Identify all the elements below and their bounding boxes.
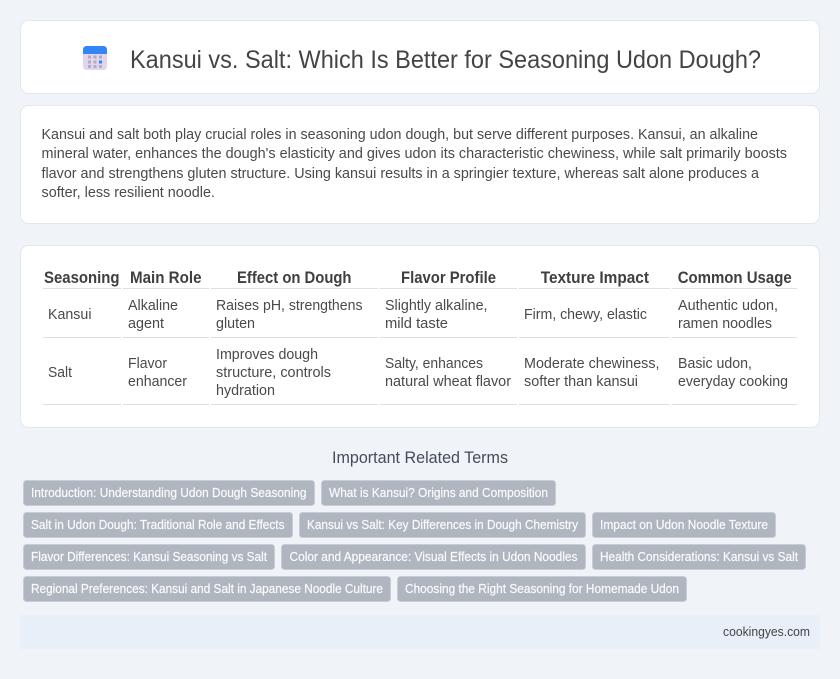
table header row: Seasoning bbox=[44, 269, 120, 287]
tag: Color and Appearance: Visual Effects in Udon Noodles bbox=[290, 550, 578, 564]
table row: Kansui: Kansui bbox=[48, 307, 92, 323]
panel: header bbox=[20, 20, 820, 94]
tag bbox=[592, 544, 806, 570]
table row: Salt: Moderate chewiness, bbox=[524, 356, 660, 372]
table header row: Effect on Dough bbox=[237, 269, 352, 287]
text block: introduction bbox=[42, 127, 787, 201]
table header row: Flavor Profile bbox=[401, 269, 496, 287]
related term tags bbox=[24, 480, 806, 602]
table header row: Main Role bbox=[130, 269, 202, 287]
table row: Kansui: agent bbox=[128, 316, 164, 332]
text block: introduction: mineral water, enhances the dough's elasticity and gives udon its characteristic chewiness, while salt primarily boosts bbox=[42, 146, 787, 162]
tag: Choosing the Right Seasoning for Homemade Udon bbox=[405, 582, 679, 596]
tag: Salt in Udon Dough: Traditional Role and Effects bbox=[31, 518, 284, 532]
text block: introduction: flavor and strengthens gluten structure. Using kansui results in a springier texture, whereas salt alone produces a bbox=[42, 166, 760, 182]
table header row: Texture Impact bbox=[541, 269, 649, 287]
tag bbox=[24, 480, 314, 506]
title: Kansui vs. Salt: Which Is Better for Seasoning Udon Dough? bbox=[130, 46, 761, 74]
table row: Kansui bbox=[48, 298, 778, 332]
footer source: cookingyes.com bbox=[723, 625, 810, 639]
table row: Kansui: Raises pH, strengthens bbox=[216, 298, 362, 314]
tag: Flavor Differences: Kansui Seasoning vs Salt bbox=[31, 550, 267, 564]
table row: Salt: everyday cooking bbox=[678, 374, 788, 390]
panel: introduction bbox=[20, 106, 820, 224]
table row: Salt: Basic udon, bbox=[678, 356, 752, 372]
table row: Salt: structure, controls bbox=[216, 365, 331, 381]
table row: Kansui: mild taste bbox=[385, 316, 448, 332]
table header row: Common Usage bbox=[678, 269, 792, 287]
table row: Salt: Salty, enhances bbox=[385, 356, 483, 372]
table row: Kansui: Alkaline bbox=[128, 298, 178, 314]
text block: introduction: Kansui and salt both play crucial roles in seasoning udon dough, but serve different purposes. Kansui, an alkaline bbox=[42, 127, 758, 143]
table row: Salt: Improves dough bbox=[216, 347, 318, 363]
tag: Kansui vs Salt: Key Differences in Dough Chemistry bbox=[307, 518, 579, 532]
table row: Kansui: Slightly alkaline, bbox=[385, 298, 488, 314]
tag bbox=[24, 544, 274, 570]
table row: Kansui: Firm, chewy, elastic bbox=[524, 307, 647, 323]
table row: Kansui: gluten bbox=[216, 316, 255, 332]
tag: Health Considerations: Kansui vs Salt bbox=[600, 550, 798, 564]
table row: Salt: natural wheat flavor bbox=[385, 374, 511, 390]
table row: Salt: Flavor bbox=[128, 356, 167, 372]
table row: Salt bbox=[48, 347, 788, 399]
table row: Kansui: ramen noodles bbox=[678, 316, 772, 332]
footer bbox=[20, 615, 820, 649]
panel: comparison table bbox=[20, 246, 820, 428]
tag bbox=[300, 512, 586, 538]
table row: Kansui: Authentic udon, bbox=[678, 298, 778, 314]
tag bbox=[322, 480, 556, 506]
tag: Impact on Udon Noodle Texture bbox=[600, 518, 768, 532]
table row: Salt: enhancer bbox=[128, 374, 187, 390]
tag: What is Kansui? Origins and Composition bbox=[329, 486, 548, 500]
table row: Salt: hydration bbox=[216, 383, 275, 399]
tag bbox=[24, 576, 390, 602]
tag bbox=[282, 544, 586, 570]
tag: Regional Preferences: Kansui and Salt in Japanese Noodle Culture bbox=[31, 582, 383, 596]
tag: Introduction: Understanding Udon Dough Seasoning bbox=[31, 486, 307, 500]
tag bbox=[24, 512, 292, 538]
table row: Salt: softer than kansui bbox=[524, 374, 638, 390]
table row: Salt: Salt bbox=[48, 365, 72, 381]
tag bbox=[398, 576, 686, 602]
icon: calendar bbox=[83, 46, 107, 70]
heading: related terms: Important Related Terms bbox=[332, 449, 508, 467]
tag bbox=[592, 512, 776, 538]
table header row bbox=[44, 269, 792, 287]
text block: introduction: softer, less resilient noodle. bbox=[42, 185, 215, 201]
